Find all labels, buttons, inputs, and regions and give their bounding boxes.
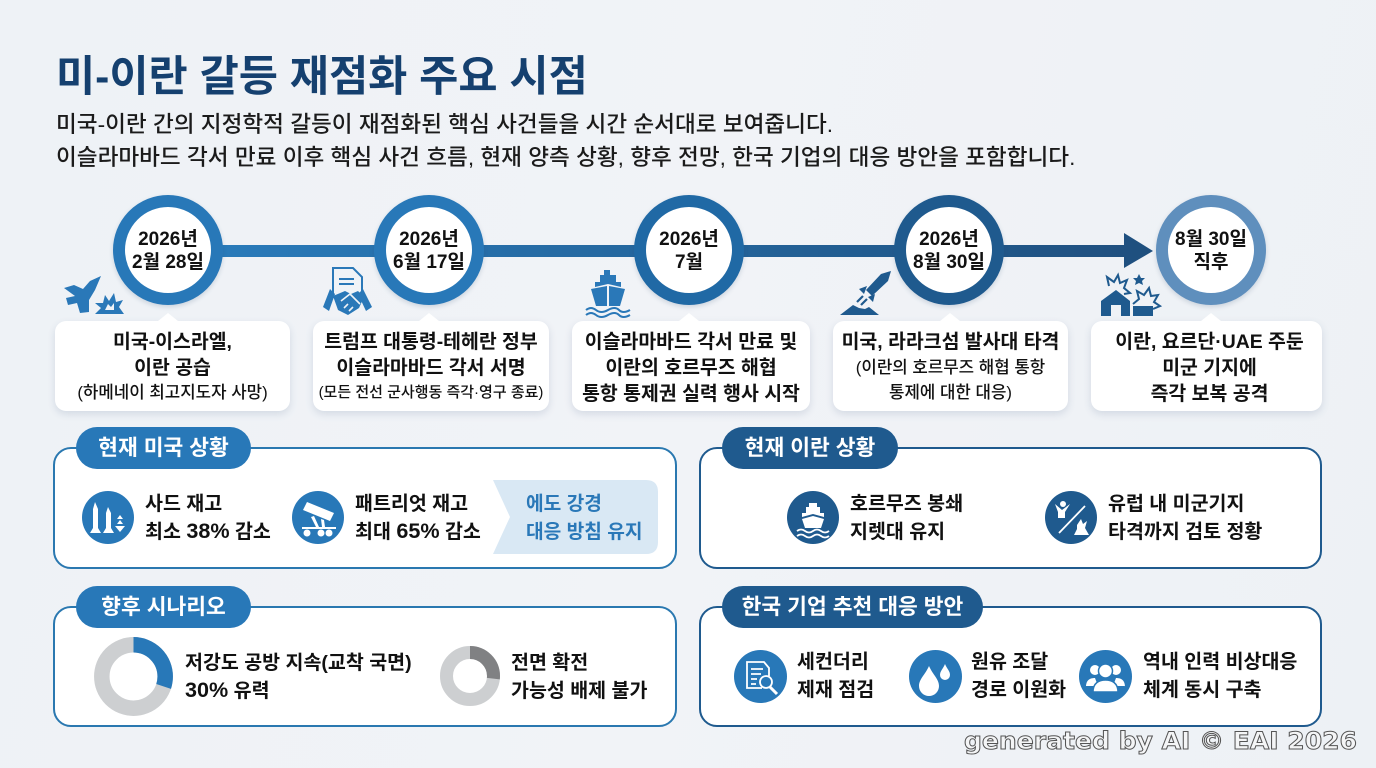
icon: ship on waves bbox=[787, 491, 839, 544]
date marker: 2026 Aug 30: 8월 30일 bbox=[913, 252, 985, 273]
text: THAAD stock: 사드 재고 bbox=[145, 493, 222, 515]
text: Patriot stock: 최대 65% 감소 bbox=[355, 518, 481, 542]
chart: donut full war bbox=[440, 646, 500, 706]
text: US bases in Europe bbox=[1108, 493, 1262, 542]
icon: people group bbox=[1079, 650, 1132, 703]
text: THAAD stock: 최소 38% 감소 bbox=[145, 518, 271, 542]
heading: recommended responses bbox=[722, 586, 983, 628]
event card 3 bbox=[572, 321, 810, 411]
event card 5: 즉각 보복 공격 bbox=[1151, 383, 1268, 405]
chart: donut 30 percent bbox=[94, 637, 173, 716]
text: in-region staff emergency: 역내 인력 비상대응 bbox=[1143, 651, 1297, 673]
event card 5: 미군 기지에 bbox=[1162, 357, 1257, 379]
subtitle text: 이슬라마바드 각서 만료 이후 핵심 사건 흐름, 현재 양측 상황, 향후 전망, 한국 기업의 대응 방안을 포함합니다. bbox=[56, 145, 1075, 170]
text: US bases in Europe: 유럽 내 미군기지 bbox=[1108, 493, 1244, 515]
text: low intensity scenario: 저강도 공방 지속(교착 국면) bbox=[185, 652, 412, 674]
text: US bases in Europe: 타격까지 검토 정황 bbox=[1108, 520, 1262, 542]
date marker: 2026 Feb 28: 2026년 bbox=[138, 229, 198, 250]
date marker: 2026 July: 7월 bbox=[675, 252, 703, 273]
heading: current Iran situation bbox=[722, 427, 898, 469]
text: Hormuz blockade: 호르무즈 봉쇄 bbox=[850, 493, 963, 515]
text: secondary sanctions check: 세컨더리 bbox=[797, 651, 869, 673]
text: full war scenario bbox=[511, 652, 647, 702]
subtitle text bbox=[56, 112, 1075, 170]
event card 2 bbox=[313, 321, 549, 411]
title: 미-이란 갈등 재점화 주요 시점 bbox=[56, 53, 588, 101]
event card 5: 이란, 요르단·UAE 주둔 bbox=[1115, 331, 1304, 353]
text: full war scenario: 전면 확전 bbox=[511, 652, 588, 674]
text: Patriot stock: 패트리엇 재고 bbox=[355, 493, 468, 515]
event card 4: 통제에 대한 대응) bbox=[889, 383, 1012, 402]
date marker: 2026 July: 2026년 bbox=[659, 229, 719, 250]
event card 3: 이란의 호르무즈 해협 bbox=[605, 357, 777, 379]
date marker: right after Aug 30: 8월 30일 bbox=[1175, 229, 1247, 250]
date marker: 2026 Aug 30: 2026년 bbox=[919, 229, 979, 250]
text: crude sourcing bbox=[971, 651, 1066, 700]
heading: future scenarios: 향후 시나리오 bbox=[101, 595, 226, 619]
icon: struck base bbox=[1101, 272, 1162, 316]
event card 2: 이슬라마바드 각서 서명 bbox=[336, 357, 526, 379]
date marker: 2026 Feb 28: 2월 28일 bbox=[132, 252, 204, 273]
text: in-region staff emergency: 체계 동시 구축 bbox=[1143, 678, 1261, 700]
text: Hormuz blockade bbox=[850, 493, 963, 542]
icon: oil drops bbox=[909, 650, 962, 703]
subtitle text: 미국-이란 간의 지정학적 갈등이 재점화된 핵심 사건들을 시간 순서대로 보여줍니다. bbox=[56, 112, 833, 137]
event card 4: (이란의 호르무즈 해협 통항 bbox=[856, 358, 1045, 377]
date marker: 2026 Jun 17: 6월 17일 bbox=[393, 252, 465, 273]
text: crude sourcing: 원유 조달 bbox=[971, 651, 1048, 673]
watermark: generated by AI © EAI 2026 bbox=[964, 727, 1357, 755]
text: crude sourcing: 경로 이원화 bbox=[971, 678, 1066, 700]
text: secondary sanctions check: 제재 점검 bbox=[797, 678, 874, 700]
heading: current US situation bbox=[76, 427, 251, 469]
event card 2: 트럼프 대통령-테헤란 정부 bbox=[324, 331, 538, 353]
callout: hardline response stance: 에도 강경 bbox=[526, 494, 602, 515]
icon: fighter jet and explosion bbox=[64, 276, 124, 314]
date marker: 2026 Jun 17 bbox=[374, 195, 484, 305]
callout: hardline response stance: 대응 방침 유지 bbox=[526, 522, 643, 542]
event card 1: 미국-이스라엘, bbox=[113, 331, 232, 353]
icon: rocket launch bbox=[840, 271, 891, 315]
panel: future scenarios bbox=[53, 606, 677, 727]
date marker: right after Aug 30 bbox=[1156, 195, 1266, 305]
text: low intensity scenario bbox=[185, 652, 412, 702]
icon: cargo ship bbox=[585, 270, 630, 318]
heading: future scenarios bbox=[76, 586, 251, 628]
icon: THAAD missiles bbox=[82, 491, 134, 544]
event card 1 bbox=[55, 321, 290, 411]
event card 1: (하메네이 최고지도자 사망) bbox=[77, 383, 268, 402]
icon: split figures with slash bbox=[1045, 491, 1097, 544]
icon: document search bbox=[734, 650, 787, 703]
panel: recommended responses for Korean firms bbox=[699, 606, 1322, 727]
event card 5 bbox=[1091, 321, 1322, 411]
icon: handshake and document bbox=[323, 267, 372, 315]
text: THAAD stock bbox=[145, 493, 271, 542]
heading: recommended responses: 한국 기업 추천 대응 방안 bbox=[742, 595, 963, 619]
event card 4: 미국, 라라크섬 발사대 타격 bbox=[842, 331, 1059, 353]
text: secondary sanctions check bbox=[797, 651, 874, 700]
panel: current US situation bbox=[53, 447, 677, 569]
icon: Patriot launcher bbox=[292, 491, 344, 544]
text: Patriot stock bbox=[355, 493, 481, 542]
date marker: 2026 July bbox=[634, 195, 744, 305]
event card 3: 이슬라마바드 각서 만료 및 bbox=[585, 331, 797, 353]
panel: current Iran situation bbox=[699, 447, 1322, 569]
heading: current US situation: 현재 미국 상황 bbox=[98, 436, 229, 460]
date marker: 2026 Aug 30 bbox=[894, 195, 1004, 305]
text: in-region staff emergency bbox=[1143, 651, 1297, 700]
event card 2: (모든 전선 군사행동 즉각·영구 종료) bbox=[319, 384, 543, 401]
date marker: 2026 Jun 17: 2026년 bbox=[399, 229, 459, 250]
text: Hormuz blockade: 지렛대 유지 bbox=[850, 520, 945, 542]
text: full war scenario: 가능성 배제 불가 bbox=[511, 680, 647, 702]
date marker: 2026 Feb 28 bbox=[113, 195, 223, 305]
date marker: right after Aug 30: 직후 bbox=[1194, 252, 1228, 273]
heading: current Iran situation: 현재 이란 상황 bbox=[745, 436, 875, 460]
event card 3: 통항 통제권 실력 행사 시작 bbox=[582, 383, 800, 405]
text: low intensity scenario: 30% 유력 bbox=[185, 676, 270, 702]
event card 1: 이란 공습 bbox=[134, 357, 211, 379]
callout: hardline response stance bbox=[493, 480, 658, 554]
event card 4 bbox=[833, 321, 1068, 411]
